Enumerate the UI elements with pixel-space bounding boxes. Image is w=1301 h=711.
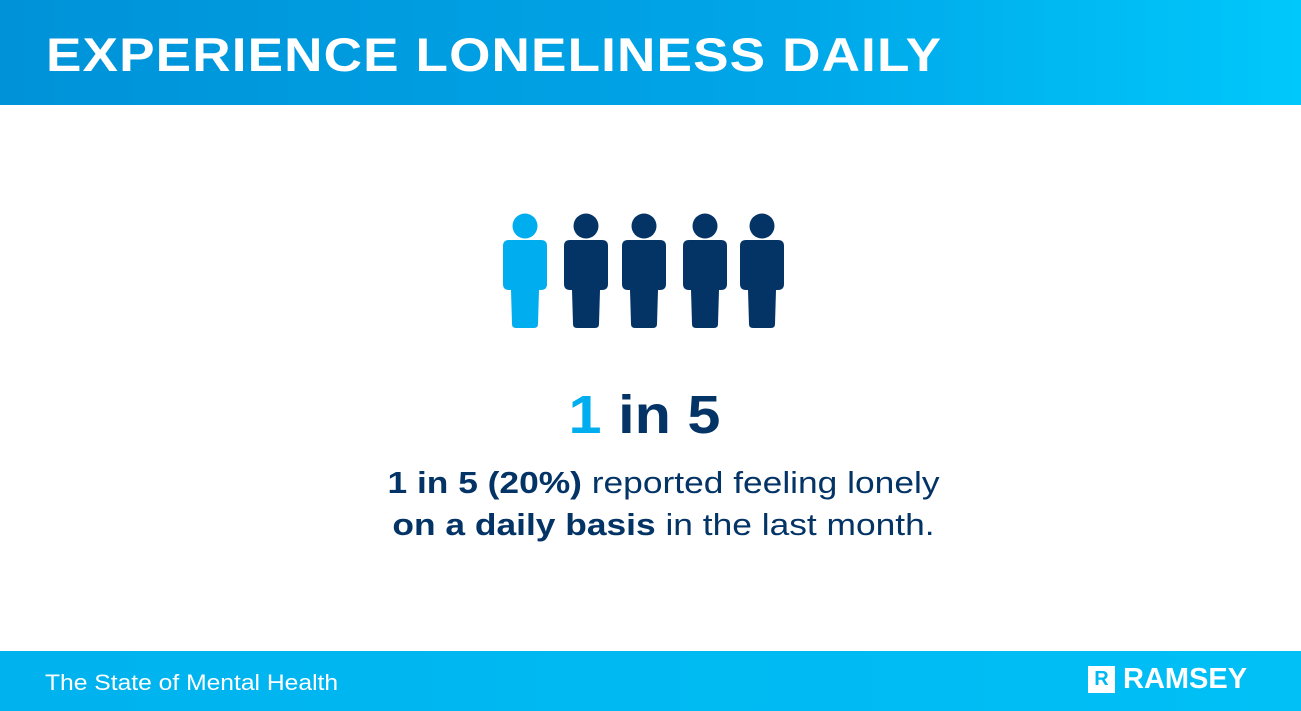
logo: R — [1094, 668, 1109, 690]
title: EXPERIENCE LONELINESS DAILY — [46, 28, 942, 81]
footer — [0, 651, 1301, 711]
logo: RAMSEY — [1123, 662, 1247, 694]
footer text: The State of Mental Health — [45, 670, 338, 695]
big stat: 1 in 5 — [569, 385, 720, 445]
header banner — [0, 0, 1301, 105]
description — [387, 465, 940, 542]
description: on a daily basis in the last month. — [392, 507, 935, 542]
description: 1 in 5 (20%) reported feeling lonely — [387, 465, 940, 500]
